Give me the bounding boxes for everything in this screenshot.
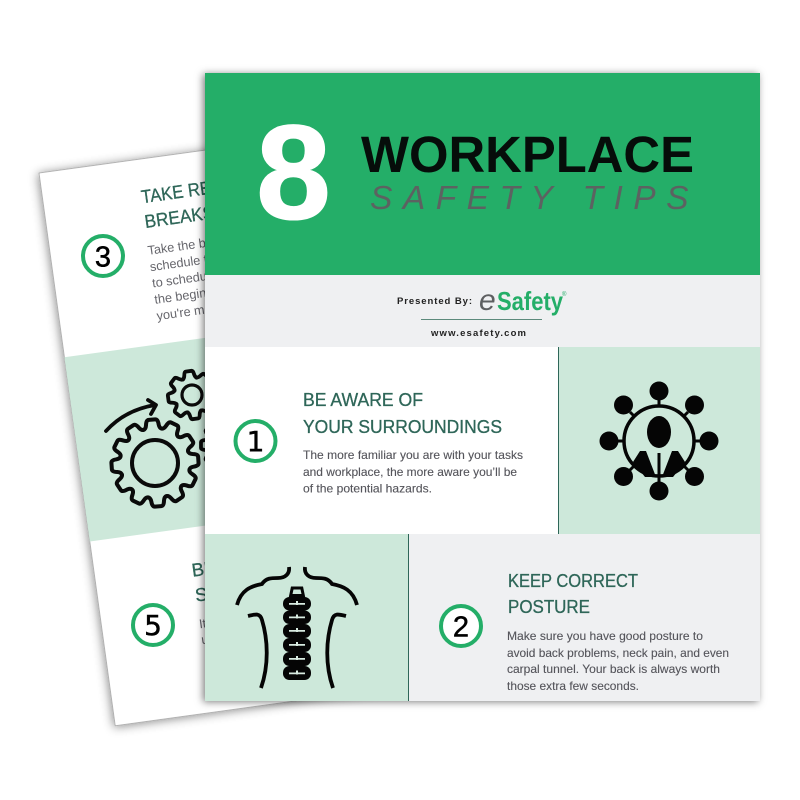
panel: tip 1 icon: [558, 347, 760, 534]
number badge 1: [236, 421, 276, 461]
tip 1 heading: YOUR SURROUNDINGS: [303, 416, 502, 437]
presented by band: [205, 275, 760, 347]
logo: eSafety: Safety: [497, 286, 563, 316]
website: www.esafety.com: [430, 328, 526, 339]
number badge 2: [441, 606, 481, 646]
panel: tip 1: [205, 347, 558, 534]
tip 1 body: The more familiar you are with your tasks: [303, 448, 523, 462]
panel: back page: the beginning of each shift so that: [153, 267, 344, 307]
big number 8: 8: [256, 98, 331, 248]
number badge 5: 5: [144, 609, 162, 642]
header band: [205, 73, 760, 275]
number badge 3: [83, 236, 123, 276]
icon: back and spine: [237, 567, 357, 688]
panel: tip 2 icon: [205, 534, 409, 701]
number badge 5: [133, 605, 173, 645]
number badge 2: 2: [453, 612, 469, 644]
panel: back page: you're more alert on the job.: [156, 288, 314, 323]
panel: front page: [205, 73, 760, 701]
title: workplace: WORKPLACE: [361, 126, 694, 183]
panel: back page: schedule them throughout the day: [149, 234, 342, 274]
logo: eSafety: ®: [562, 291, 567, 298]
number badge 3: 3: [95, 242, 111, 274]
panel: back page: BREAKS: [143, 202, 215, 232]
panel: back page: Take the breaks you need when you: [147, 216, 350, 258]
tip 2 body: [507, 629, 729, 693]
tip 2 body: those extra few seconds.: [507, 679, 639, 693]
tip 1 heading: [303, 389, 502, 437]
panel: back page: [39, 97, 667, 726]
subtitle: safety tips: SAFETY TIPS: [370, 180, 699, 217]
tip 2 body: avoid back problems, neck pain, and even: [507, 646, 729, 660]
tip 2 heading: [508, 570, 638, 617]
panel: back page: to schedule your time. Plan them at: [151, 249, 351, 291]
panel: back page: TAKE REGULAR: [140, 169, 269, 207]
number badge 1: 1: [247, 425, 264, 458]
panel: back page: BE SAFE: [190, 549, 271, 581]
icon: gears with arrow: [106, 368, 249, 509]
panel: back page: SMART: [194, 576, 260, 606]
tip 2 body: carpal tunnel. Your back is always worth: [507, 662, 720, 676]
panel: back page: It's always best: [198, 606, 285, 631]
tip 2 heading: KEEP CORRECT: [508, 570, 638, 591]
icon: person in network: [600, 382, 718, 500]
panel: tip 2: [409, 534, 760, 701]
tip 2 body: Make sure you have good posture to: [507, 629, 703, 643]
logo: eSafety: e: [479, 284, 496, 317]
panel: back page: use the right tools: [200, 620, 302, 647]
tip 1 body: of the potential hazards.: [303, 482, 432, 496]
logo: eSafety: [479, 284, 567, 317]
tip 1 body: and workplace, the more aware you’ll be: [303, 465, 517, 479]
presented by label: Presented By:: [397, 296, 472, 307]
tip 1 heading: BE AWARE OF: [303, 389, 423, 410]
tip 1 body: [303, 448, 523, 496]
tip 2 heading: POSTURE: [508, 596, 590, 617]
